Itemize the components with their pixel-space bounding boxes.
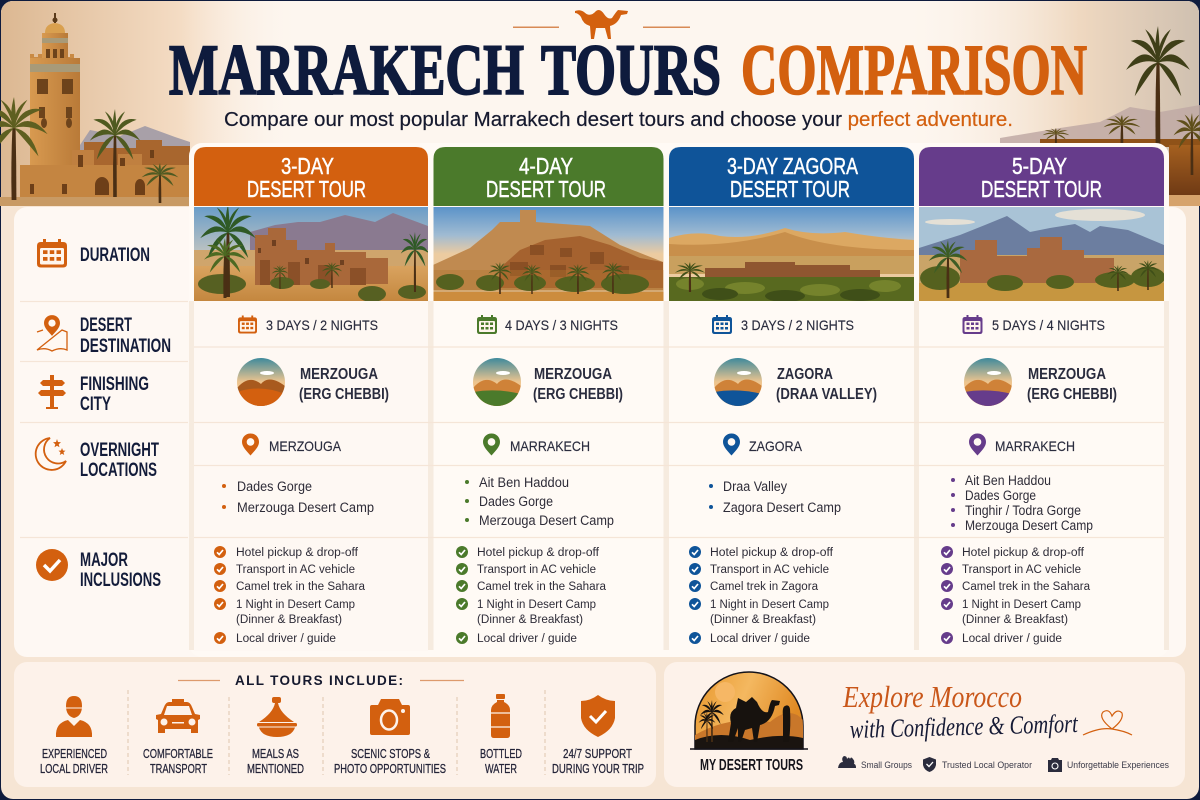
header: DESERT TOUR <box>486 176 606 202</box>
inclusions list: 1 Night in Desert Camp <box>962 599 1081 611</box>
duration: 4 DAYS / 3 NIGHTS <box>505 317 618 333</box>
photo: ksar on hill <box>433 207 664 301</box>
duration <box>238 315 378 334</box>
panel: brand <box>664 662 1185 787</box>
destination <box>714 358 877 406</box>
destination: (ERG CHEBBI) <box>533 386 623 403</box>
label: desert destination <box>37 315 171 357</box>
label: finishing city: FINISHING <box>80 374 149 395</box>
header: 3-DAY ZAGORA <box>727 153 859 179</box>
duration: 3 DAYS / 2 NIGHTS <box>741 317 854 333</box>
inclusions list <box>689 546 834 645</box>
photo: kasbah with mountains <box>919 207 1165 301</box>
icon: camel <box>513 10 690 39</box>
trust badges: Trusted Local Operator <box>942 760 1032 771</box>
logo: my desert tours <box>690 672 808 774</box>
tagline <box>842 679 1132 744</box>
overnight list <box>465 475 614 528</box>
item: tagine <box>247 697 304 776</box>
inclusions list: 1 Night in Desert Camp <box>477 599 596 611</box>
finishing city: MARRAKECH <box>995 438 1075 454</box>
overnight list: Merzouga Desert Camp <box>237 500 374 515</box>
item: transport: TRANSPORT <box>150 762 207 776</box>
header <box>194 147 428 206</box>
overnight list: Dades Gorge <box>479 494 553 509</box>
finishing city <box>723 433 803 456</box>
inclusions list: Local driver / guide <box>236 633 336 645</box>
overnight list: Merzouga Desert Camp <box>965 518 1093 533</box>
panel: all tours include <box>14 662 656 787</box>
subtitle: Compare our most popular Marrakech desert tours and choose your perfect adventure. <box>224 108 1013 131</box>
item: support shield: DURING YOUR TRIP <box>552 762 644 776</box>
column: 3-day Zagora desert tour <box>669 147 914 645</box>
trust badges <box>838 756 1169 772</box>
header <box>434 147 664 206</box>
inclusions list: Camel trek in the Sahara <box>477 581 607 593</box>
label: finishing city <box>38 374 149 415</box>
destination: MERZOUGA <box>300 366 378 383</box>
inclusions list: Hotel pickup & drop-off <box>477 547 600 559</box>
item: support shield: 24/7 SUPPORT <box>563 747 632 761</box>
finishing city: ZAGORA <box>749 438 803 454</box>
duration: 5 DAYS / 4 NIGHTS <box>992 317 1105 333</box>
item: driver: EXPERIENCED <box>42 747 107 761</box>
overnight list: Zagora Desert Camp <box>723 500 841 515</box>
destination: ZAGORA <box>777 366 833 383</box>
inclusions list: 1 Night in Desert Camp <box>236 599 355 611</box>
item: camera: PHOTO OPPORTUNITIES <box>334 762 446 776</box>
label: desert destination: DESTINATION <box>80 336 171 357</box>
duration <box>712 315 854 334</box>
inclusions list: Transport in AC vehicle <box>710 564 829 576</box>
item: camera <box>334 699 446 776</box>
illustration: Koutoubia minaret scene <box>0 13 190 206</box>
overnight list: Ait Ben Haddou <box>479 475 569 490</box>
panel: row labels <box>36 239 171 591</box>
header <box>919 147 1164 206</box>
duration <box>962 315 1105 334</box>
item: tagine: MEALS AS <box>252 747 299 761</box>
item: bottled water: WATER <box>485 762 517 776</box>
overnight list <box>222 479 374 515</box>
inclusions list: Hotel pickup & drop-off <box>710 547 834 559</box>
duration <box>477 315 618 334</box>
title <box>169 10 1087 110</box>
item: bottled water <box>480 694 522 776</box>
item: transport: COMFORTABLE <box>143 747 213 761</box>
item: camera: SCENIC STOPS & <box>351 747 430 761</box>
destination <box>473 358 623 406</box>
inclusions list: Local driver / guide <box>962 633 1062 645</box>
item: bottled water: BOTTLED <box>480 747 522 761</box>
destination: (ERG CHEBBI) <box>299 386 389 403</box>
destination <box>964 358 1117 406</box>
header <box>669 147 914 206</box>
inclusions list: Camel trek in Zagora <box>710 581 819 593</box>
inclusions list: Hotel pickup & drop-off <box>962 547 1085 559</box>
header: 3-DAY <box>281 153 334 179</box>
trust badges: Unforgettable Experiences <box>1067 760 1169 771</box>
inclusions list: Local driver / guide <box>477 633 577 645</box>
inclusions list <box>456 546 607 645</box>
inclusions list: Hotel pickup & drop-off <box>236 547 359 559</box>
illustration: palm and mountain scene <box>1000 26 1200 206</box>
item: transport <box>143 699 213 776</box>
inclusions list: (Dinner & Breakfast) <box>962 614 1068 626</box>
header: DESERT TOUR <box>247 176 366 202</box>
column: 3-day desert tour <box>194 147 429 645</box>
inclusions list <box>941 546 1091 645</box>
destination: (ERG CHEBBI) <box>1027 386 1117 403</box>
header: 4-DAY <box>519 153 573 179</box>
panel: comparison table <box>14 143 1186 657</box>
logo: my desert tours: MY DESERT TOURS <box>700 757 803 774</box>
icon: heart flourish <box>1083 711 1132 735</box>
item: driver: LOCAL DRIVER <box>40 762 108 776</box>
photo: dunes and oasis <box>669 207 914 302</box>
duration: 3 DAYS / 2 NIGHTS <box>266 317 378 333</box>
label: major inclusions: MAJOR <box>80 550 128 571</box>
title: TOURS <box>541 30 721 110</box>
overnight list: Tinghir / Todra Gorge <box>965 503 1081 518</box>
header: DESERT TOUR <box>981 176 1102 202</box>
overnight list: Draa Valley <box>723 479 787 494</box>
inclusions list: Camel trek in the Sahara <box>962 581 1091 593</box>
item: tagine: MENTIONED <box>247 762 304 776</box>
label: finishing city: CITY <box>80 394 111 415</box>
finishing city <box>242 433 342 456</box>
inclusions list: Transport in AC vehicle <box>962 564 1081 576</box>
inclusions list: (Dinner & Breakfast) <box>477 614 583 626</box>
inclusions list: Transport in AC vehicle <box>477 564 596 576</box>
label: major inclusions <box>36 549 161 591</box>
column: 4-day desert tour <box>433 147 664 645</box>
heading: ALL TOURS INCLUDE: <box>235 673 403 688</box>
inclusions list: 1 Night in Desert Camp <box>710 599 829 611</box>
inclusions list: (Dinner & Breakfast) <box>236 614 342 626</box>
inclusions list: (Dinner & Breakfast) <box>710 614 816 626</box>
destination: MERZOUGA <box>1028 366 1106 383</box>
label: duration <box>37 239 150 268</box>
photo: kasbah with palms <box>194 205 429 302</box>
tagline: with Confidence & Comfort <box>849 709 1079 744</box>
title: MARRAKECH <box>169 30 524 110</box>
destination <box>237 358 389 406</box>
label: major inclusions: INCLUSIONS <box>80 570 161 591</box>
overnight list <box>709 479 841 515</box>
inclusions list: Camel trek in the Sahara <box>236 581 366 593</box>
item: driver <box>40 696 108 776</box>
finishing city: MERZOUGA <box>269 438 342 454</box>
overnight list: Ait Ben Haddou <box>965 473 1051 488</box>
destination: (DRAA VALLEY) <box>776 386 877 403</box>
tagline: Explore Morocco <box>842 679 1022 714</box>
label: overnight locations: LOCATIONS <box>80 460 157 481</box>
header: 5-DAY <box>1012 153 1067 179</box>
finishing city: MARRAKECH <box>510 438 590 454</box>
overnight list: Dades Gorge <box>237 479 312 494</box>
overnight list: Dades Gorge <box>965 488 1036 503</box>
overnight list <box>951 473 1093 533</box>
label: duration: DURATION <box>80 245 150 266</box>
column: 5-day desert tour <box>919 147 1165 645</box>
label: desert destination: DESERT <box>80 315 132 336</box>
finishing city <box>483 433 590 456</box>
destination: MERZOUGA <box>534 366 612 383</box>
inclusions list: Local driver / guide <box>710 633 810 645</box>
label: overnight locations: OVERNIGHT <box>80 440 159 461</box>
item: support shield <box>552 695 644 776</box>
header: DESERT TOUR <box>730 176 850 202</box>
overnight list: Merzouga Desert Camp <box>479 513 614 528</box>
label: overnight locations <box>36 438 159 481</box>
finishing city <box>969 433 1075 456</box>
inclusions list <box>214 546 366 645</box>
trust badges: Small Groups <box>861 760 912 771</box>
inclusions list: Transport in AC vehicle <box>236 564 355 576</box>
